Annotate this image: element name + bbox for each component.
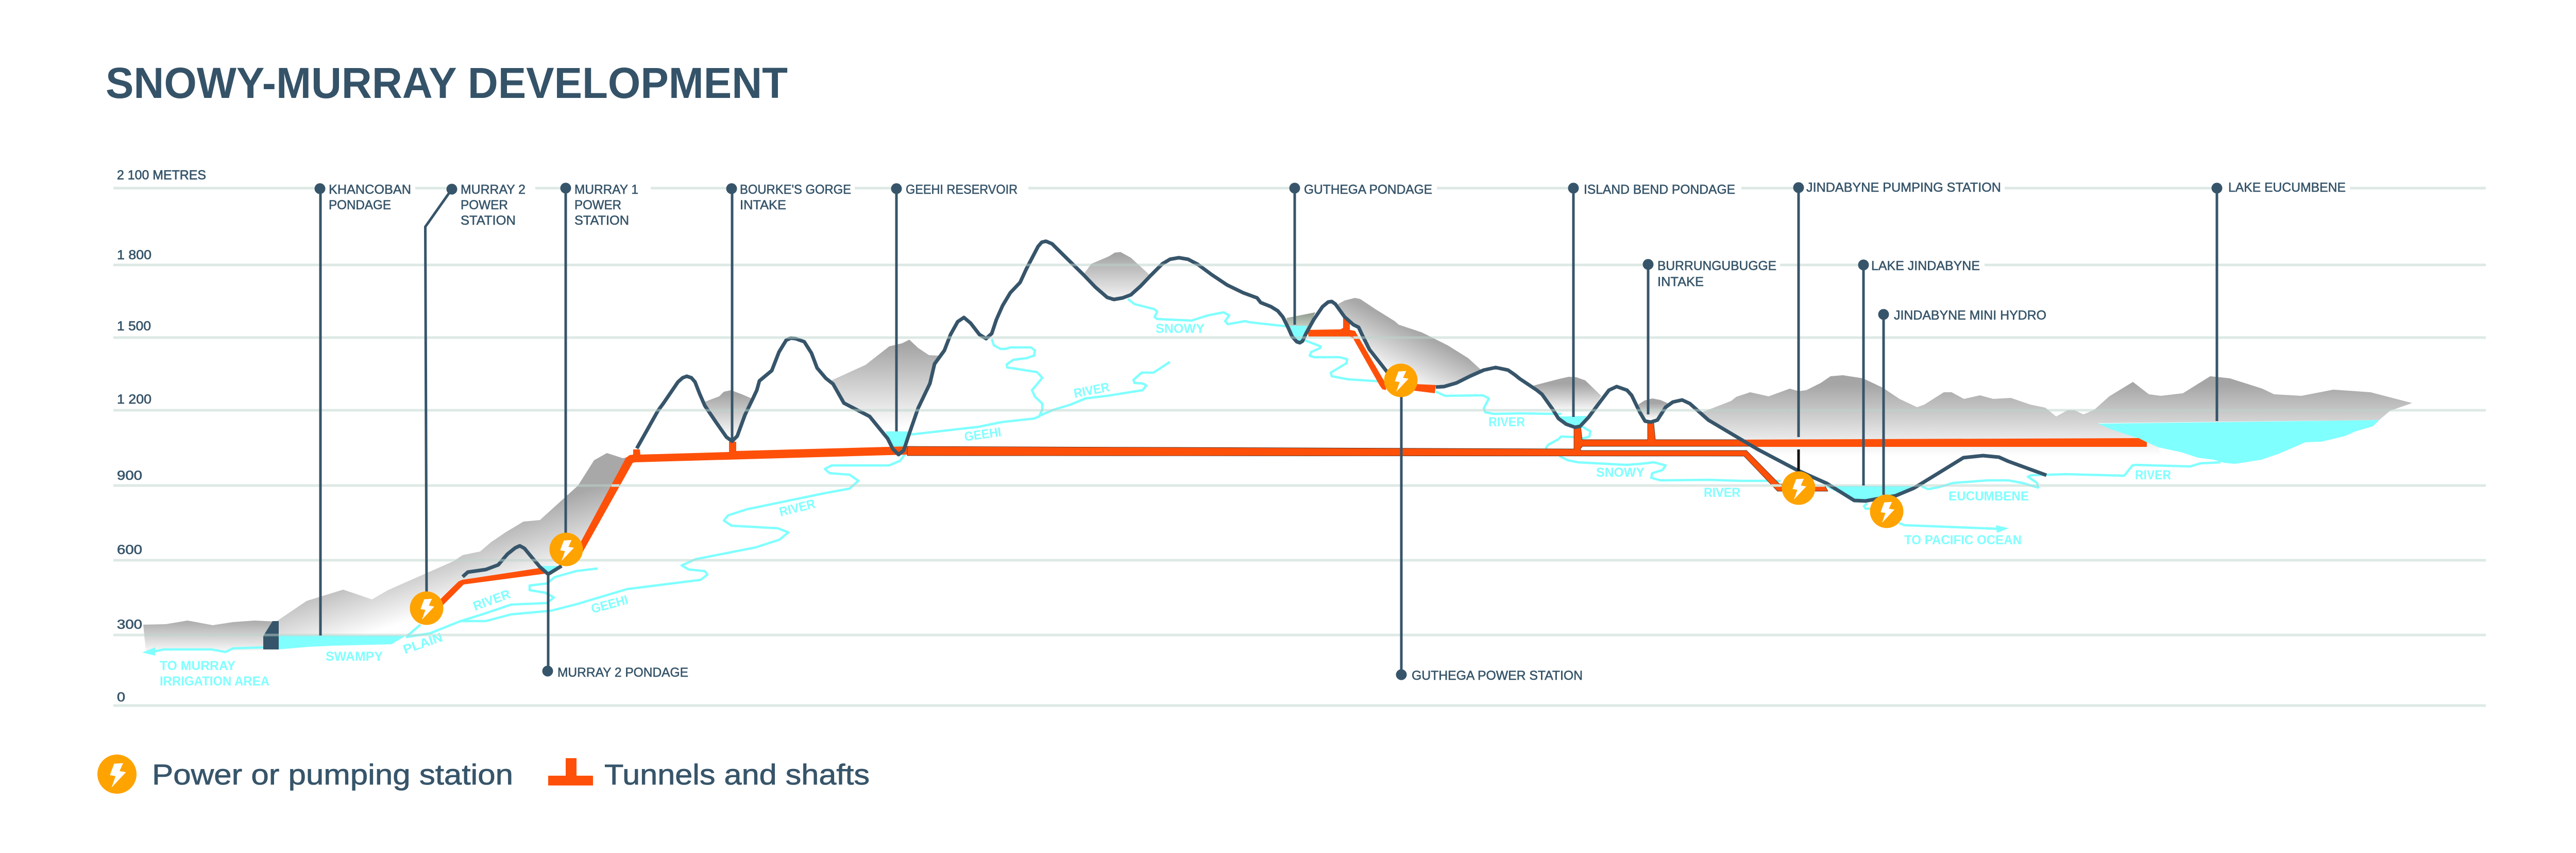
callout: Khancoban Pondage: PONDAGE <box>329 198 391 212</box>
water: lakes, pondages and reservoirs <box>279 326 2379 649</box>
callout: Geehi Reservoir: GEEHI RESERVOIR <box>906 182 1018 197</box>
callout: Bourke's Gorge Intake: INTAKE <box>740 198 786 212</box>
icon: Guthega power station <box>1384 364 1418 397</box>
callout: Jindabyne Mini Hydro <box>1878 308 2046 495</box>
river labels: SWAMPY <box>326 649 383 664</box>
axis labels: elevation in metres: 600 <box>117 543 142 557</box>
river labels: RIVER <box>1704 486 1740 500</box>
callout: Guthega Power Station: GUTHEGA POWER STATION <box>1412 668 1583 683</box>
river labels: SNOWY <box>1156 322 1205 336</box>
icon: Murray 1 power station <box>549 533 583 566</box>
legend icon: power or pumping station <box>97 755 137 794</box>
callout: Jindabyne Pumping Station <box>1793 180 2001 471</box>
axis labels: elevation in metres: 1 800 <box>117 248 151 262</box>
callout: Murray 2 Power Station: STATION <box>461 213 516 228</box>
river labels: IRRIGATION AREA <box>160 674 269 689</box>
icon: Jindabyne pumping station <box>1782 471 1816 505</box>
river labels: TO MURRAY <box>160 659 235 673</box>
dam: Khancoban <box>263 621 279 649</box>
river labels: EUCUMBENE <box>1948 489 2029 504</box>
callout: Murray 1 Power Station <box>561 182 638 534</box>
river labels: GEEHI <box>589 593 630 616</box>
callout: Bourke's Gorge Intake: BOURKE'S GORGE <box>740 182 851 197</box>
callout: Murray 2 Power Station: POWER <box>461 198 508 212</box>
axis labels: elevation in metres: 300 <box>117 617 142 632</box>
river labels: PLAIN <box>401 630 445 657</box>
callout: Murray 2 Power Station: MURRAY 2 <box>461 182 526 197</box>
callout: Murray 2 Pondage <box>542 574 688 680</box>
callout: Burrungubugge Intake: INTAKE <box>1657 275 1704 289</box>
axis labels: elevation in metres: 2 100 METRES <box>117 168 206 182</box>
callout: Murray 1 Power Station: STATION <box>574 213 629 228</box>
river labels <box>160 322 2171 689</box>
axis labels: elevation in metres: 900 <box>117 469 142 483</box>
river labels: SNOWY <box>1596 465 1645 480</box>
axis labels: elevation in metres: 1 200 <box>117 392 151 407</box>
axis labels: elevation in metres <box>117 168 206 705</box>
river labels: RIVER <box>2135 468 2171 482</box>
callout: Khancoban Pondage <box>314 182 411 635</box>
terrain profile: dark ridge lines <box>463 241 2046 577</box>
callout: Burrungubugge Intake <box>1642 259 1776 414</box>
callout: Burrungubugge Intake: BURRUNGUBUGGE <box>1657 259 1776 273</box>
mountains: grey terrain silhouettes <box>143 252 2412 650</box>
callout: Murray 2 Power Station <box>426 182 526 592</box>
callout: Jindabyne Pumping Station: JINDABYNE PUMPING STATION <box>1806 180 2001 195</box>
axis labels: elevation in metres: 1 500 <box>117 319 151 333</box>
icon: Jindabyne mini hydro <box>1870 495 1903 528</box>
axis labels: elevation in metres: 0 <box>117 690 125 705</box>
legend <box>97 755 870 794</box>
gridlines: elevation scale <box>113 188 2486 706</box>
callout: Lake Eucumbene: LAKE EUCUMBENE <box>2228 180 2346 195</box>
callout: Guthega Pondage: GUTHEGA PONDAGE <box>1304 182 1432 197</box>
river labels: RIVER <box>778 496 817 520</box>
river labels: RIVER <box>1488 415 1525 429</box>
river labels: GEEHI <box>963 425 1002 444</box>
callout: Lake Eucumbene <box>2211 180 2346 421</box>
callout: Lake Jindabyne: LAKE JINDABYNE <box>1871 259 1980 273</box>
callout: Bourke's Gorge Intake <box>726 182 851 440</box>
callout: Murray 1 Power Station: POWER <box>574 198 621 212</box>
callout: Guthega Pondage <box>1289 182 1432 325</box>
callout: Island Bend Pondage <box>1568 182 1735 417</box>
tunnels and shafts: orange conduits <box>438 318 2147 606</box>
callout: Guthega Power Station <box>1396 397 1583 683</box>
callout: Murray 1 Power Station: MURRAY 1 <box>574 182 638 197</box>
river labels: TO PACIFIC OCEAN <box>1904 533 2022 547</box>
river labels: RIVER <box>471 587 513 614</box>
callout: Island Bend Pondage: ISLAND BEND PONDAGE <box>1584 182 1735 197</box>
callout: Geehi Reservoir <box>891 182 1018 431</box>
legend label: power or pumping station: Power or pumping station <box>152 758 513 791</box>
legend label: tunnels and shafts: Tunnels and shafts <box>604 758 870 791</box>
legend icon: tunnels and shafts <box>548 758 593 785</box>
title: SNOWY-MURRAY DEVELOPMENT <box>106 59 788 107</box>
icon: Murray 2 power station <box>410 592 443 625</box>
callout: Murray 2 Pondage: MURRAY 2 PONDAGE <box>557 665 688 680</box>
callout: Lake Jindabyne <box>1858 259 1980 486</box>
callout: Jindabyne Mini Hydro: JINDABYNE MINI HYDRO <box>1894 308 2046 323</box>
river labels: RIVER <box>1073 380 1111 401</box>
rivers: cyan watercourses <box>142 299 2221 656</box>
callout: Khancoban Pondage: KHANCOBAN <box>329 182 411 197</box>
